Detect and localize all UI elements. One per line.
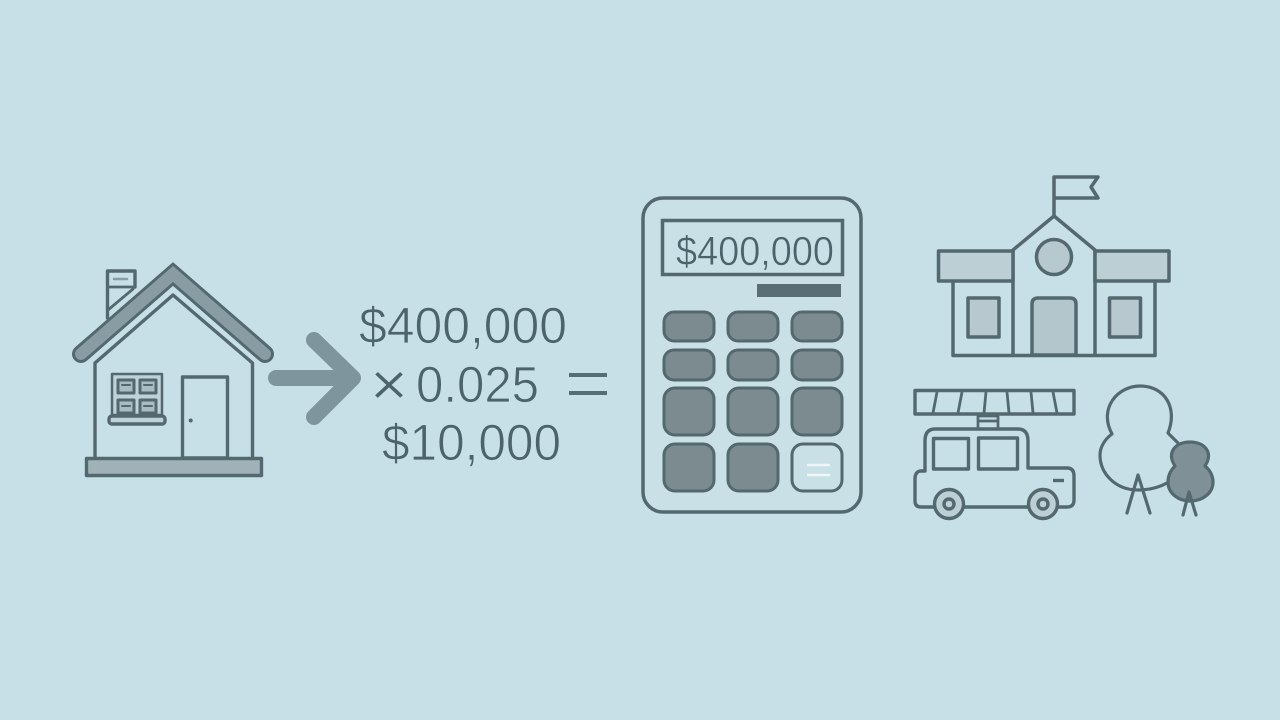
calculator keys [664,312,842,491]
door [182,377,228,458]
large tree [1100,386,1178,513]
bus handle [1053,479,1064,482]
display bar [757,284,841,297]
bus windows [934,438,968,469]
calculator display: $400,000 [676,228,834,274]
school round window [1036,240,1072,274]
icon: bus with solar panel [915,390,1074,518]
bus body [915,429,1074,507]
chimney [108,271,135,318]
panel mount [978,416,998,428]
icon: house [81,271,265,476]
result: $10,000: $10,000 [382,414,561,471]
flag [1054,177,1098,216]
equals sign [569,375,607,393]
small tree [1168,442,1213,515]
equals key [792,444,842,491]
formula text [359,297,567,471]
arrow [276,340,353,417]
multiplication sign: × [370,351,408,418]
bus wheels [934,490,1058,518]
calculator body [643,198,861,512]
roof [81,274,265,354]
window [109,374,165,424]
house base [86,458,262,476]
school side walls [953,281,1155,356]
school windows [968,298,1140,337]
solar panel [915,390,1074,414]
multiplier: 0.025: 0.025 [416,356,539,413]
school door [1032,298,1076,355]
house walls [95,295,252,458]
icon: calculator [643,198,861,512]
icon: trees [1100,386,1213,515]
icon: school [938,177,1169,356]
school centre block [1013,216,1095,355]
school roof wings [938,251,1169,281]
amount: $400,000: $400,000 [359,297,567,354]
